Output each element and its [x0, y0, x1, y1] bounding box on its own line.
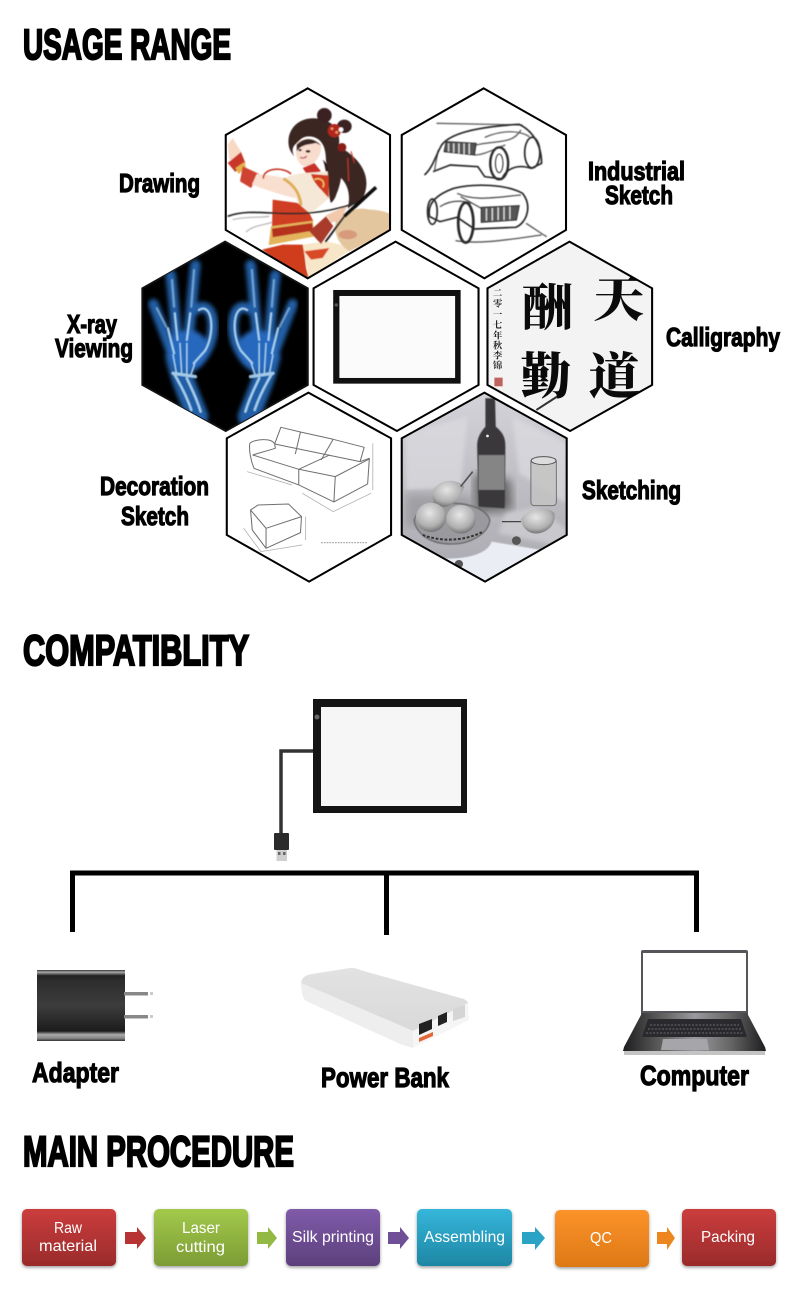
- hexagon: sketching still life: [399, 390, 571, 583]
- icon: power bank: [301, 968, 469, 1048]
- step: packing: [682, 1209, 776, 1266]
- hexagon: x-ray: [142, 242, 308, 431]
- hexagon: calligraphy: 七: [493, 317, 502, 331]
- step: raw material: [22, 1209, 116, 1266]
- step: qc: [555, 1210, 649, 1267]
- hexagon: calligraphy: 锦: [493, 358, 502, 372]
- arrow: [522, 1227, 545, 1250]
- connector bracket: [72, 873, 696, 935]
- label: adapter: Adapter: [32, 1057, 119, 1088]
- hexagon: drawing: [223, 87, 392, 280]
- illustration: girl with stylus: [228, 108, 392, 278]
- panel: usage hexagon grid: [142, 87, 655, 583]
- arrow: [388, 1227, 409, 1249]
- label: sketching: Sketching: [582, 475, 681, 505]
- step: laser cutting: [154, 1209, 248, 1266]
- step: qc: QC: [590, 1230, 612, 1247]
- arrow: [657, 1227, 675, 1250]
- label: computer: Computer: [640, 1060, 749, 1091]
- label: industrial sketch: Sketch: [605, 180, 673, 210]
- icon: adapter: [37, 970, 153, 1041]
- step: assembling: Assembling: [424, 1229, 505, 1246]
- step: silk printing: [286, 1209, 380, 1266]
- step: raw material: material: [39, 1238, 97, 1255]
- step: raw material: Raw: [54, 1220, 82, 1237]
- heading: compatibility: COMPATIBLITY: [23, 627, 249, 675]
- icon: laptop: [623, 950, 766, 1055]
- hexagon: calligraphy: 秋: [493, 338, 502, 352]
- step: silk printing: Silk printing: [292, 1229, 374, 1246]
- illustration: sofa and ottoman: [244, 427, 373, 552]
- heading: main procedure: MAIN PROCEDURE: [23, 1128, 294, 1176]
- label: x-ray viewing: Viewing: [55, 333, 133, 363]
- label: x-ray viewing: [55, 309, 133, 363]
- hexagon: decoration sketch: [227, 393, 391, 582]
- icon: light pad with usb cable: [274, 699, 467, 861]
- flowchart: procedure steps: [22, 1209, 776, 1267]
- hexagon: calligraphy: 一: [493, 306, 502, 320]
- hexagon: calligraphy: 零: [493, 296, 502, 310]
- label: decoration sketch: Decoration: [100, 471, 209, 501]
- label: drawing: Drawing: [119, 168, 200, 198]
- calligraphy characters: 天: [593, 260, 644, 331]
- hexagon: calligraphy: [485, 240, 655, 433]
- label: x-ray viewing: X-ray: [67, 309, 117, 339]
- heading: usage range: USAGE RANGE: [23, 21, 231, 69]
- step: packing: Packing: [701, 1229, 755, 1246]
- label: industrial sketch: Industrial: [588, 156, 685, 186]
- step: laser cutting: cutting: [176, 1239, 225, 1256]
- illustration: car sketches: [424, 123, 547, 243]
- label: decoration sketch: [100, 471, 209, 531]
- hexagon: light pad centre: [314, 242, 479, 431]
- hexagon: industrial sketch: [399, 87, 567, 280]
- label: industrial sketch: [588, 156, 685, 210]
- label: decoration sketch: Sketch: [121, 501, 189, 531]
- arrow: [125, 1227, 146, 1249]
- hexagon: calligraphy: 李: [493, 348, 502, 362]
- calligraphy characters: 道: [589, 337, 640, 408]
- step: assembling: [417, 1209, 512, 1266]
- calligraphy characters: [522, 277, 644, 398]
- step: laser cutting: Laser: [182, 1220, 221, 1237]
- hexagon: calligraphy: 年: [493, 328, 502, 342]
- calligraphy characters: 酬: [522, 269, 573, 340]
- label: power bank: Power Bank: [321, 1062, 449, 1093]
- calligraphy characters: 勤: [520, 337, 571, 408]
- arrow: [257, 1227, 277, 1249]
- hexagon: calligraphy: 二: [493, 285, 502, 299]
